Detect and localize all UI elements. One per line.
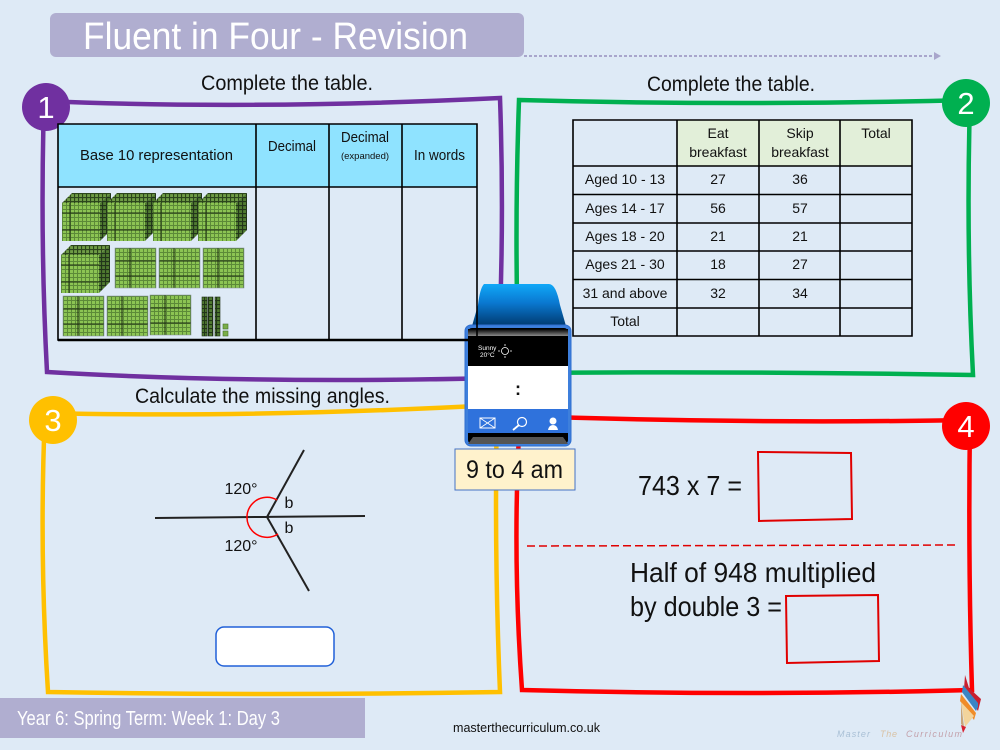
table 2: breakfast: 34	[792, 285, 808, 301]
badge 4: 4	[957, 409, 975, 444]
base 10 blocks	[61, 193, 247, 336]
badge 2	[942, 79, 990, 127]
smartwatch timer: Sunny	[478, 345, 497, 352]
table 2: breakfast: 36	[792, 171, 808, 187]
logo: wordmark	[837, 729, 962, 739]
table 2: breakfast: Aged 10 - 13	[585, 171, 665, 187]
table 2: breakfast: 31 and above	[583, 285, 668, 301]
table 2: breakfast: 21	[792, 228, 808, 244]
heading: panel 3: Calculate the missing angles.	[135, 385, 390, 408]
table 1: place value: (expanded)	[341, 151, 389, 162]
answer box: word problem	[786, 595, 879, 663]
angle diagram: b	[285, 495, 294, 512]
table 2: breakfast: Ages 14 - 17	[585, 200, 665, 216]
table 2: breakfast: 21	[710, 228, 726, 244]
panel 4 frame: red	[516, 416, 972, 693]
smartwatch timer: :	[515, 379, 521, 399]
footer: term label	[0, 698, 365, 738]
heading: panel 1: Complete the table.	[201, 72, 373, 95]
divider	[527, 545, 958, 546]
footer: website: masterthecurriculum.co.uk	[453, 720, 600, 735]
table 2: breakfast: 56	[710, 200, 726, 216]
angle diagram: b	[285, 520, 294, 537]
table 2: breakfast: breakfast	[771, 144, 829, 160]
smartwatch timer: 20°C	[480, 351, 495, 359]
table 2: breakfast: 27	[710, 171, 726, 187]
table 2: breakfast: Eat	[707, 125, 729, 141]
smartwatch timer	[465, 284, 571, 446]
word problem	[630, 557, 876, 622]
angle diagram: 120°	[224, 481, 258, 498]
angle diagram	[155, 450, 365, 591]
badge 4	[942, 402, 990, 450]
table 2: breakfast: 32	[710, 285, 726, 301]
answer box: multiplication	[758, 452, 852, 521]
logo: wordmark: Master	[837, 729, 871, 739]
angle diagram: 120°	[224, 538, 258, 555]
panel 2 frame: green	[516, 100, 973, 375]
answer box: panel 3	[216, 627, 334, 666]
badge 1	[22, 83, 70, 131]
badge 2: 2	[957, 86, 975, 121]
table 2: breakfast: 18	[710, 256, 726, 272]
time label: 9 to 4 am	[466, 456, 563, 484]
logo: pencil	[960, 675, 981, 733]
badge 3	[29, 396, 77, 444]
heading: panel 2: Complete the table.	[647, 73, 815, 96]
footer: term label: Year 6: Spring Term: Week 1: Day 3	[17, 708, 280, 730]
table 2: breakfast: breakfast	[689, 144, 747, 160]
panel 1 frame: purple	[43, 98, 502, 380]
table 2: breakfast: Ages 21 - 30	[585, 256, 665, 272]
equation: 743 x 7: 743 x 7 =	[638, 470, 742, 501]
logo: wordmark: Curriculum	[906, 729, 962, 739]
table 1: place value: Decimal	[268, 138, 316, 155]
table 1: place value: Decimal	[341, 129, 389, 146]
word problem: Half of 948 multiplied	[630, 557, 876, 588]
table 2: breakfast: 27	[792, 256, 808, 272]
table 2: breakfast: Ages 18 - 20	[585, 228, 665, 244]
table 2: breakfast: Total	[861, 125, 891, 141]
table 2: breakfast	[573, 120, 912, 336]
title banner: Fluent in Four - Revision	[83, 16, 468, 58]
table 1: place value: Base 10 representation	[80, 147, 233, 164]
table 1: place value	[58, 124, 477, 340]
badge 3: 3	[44, 403, 62, 438]
table 2: breakfast: Skip	[786, 125, 814, 141]
table 1: place value: In words	[414, 147, 465, 164]
word problem: by double 3 =	[630, 591, 782, 622]
time label	[455, 449, 575, 490]
title banner	[50, 13, 941, 60]
table 2: breakfast: 57	[792, 200, 808, 216]
badge 1: 1	[37, 90, 55, 125]
logo: wordmark: The	[880, 729, 897, 739]
table 2: breakfast: Total	[610, 313, 640, 329]
panel 3 frame: yellow	[43, 405, 500, 694]
